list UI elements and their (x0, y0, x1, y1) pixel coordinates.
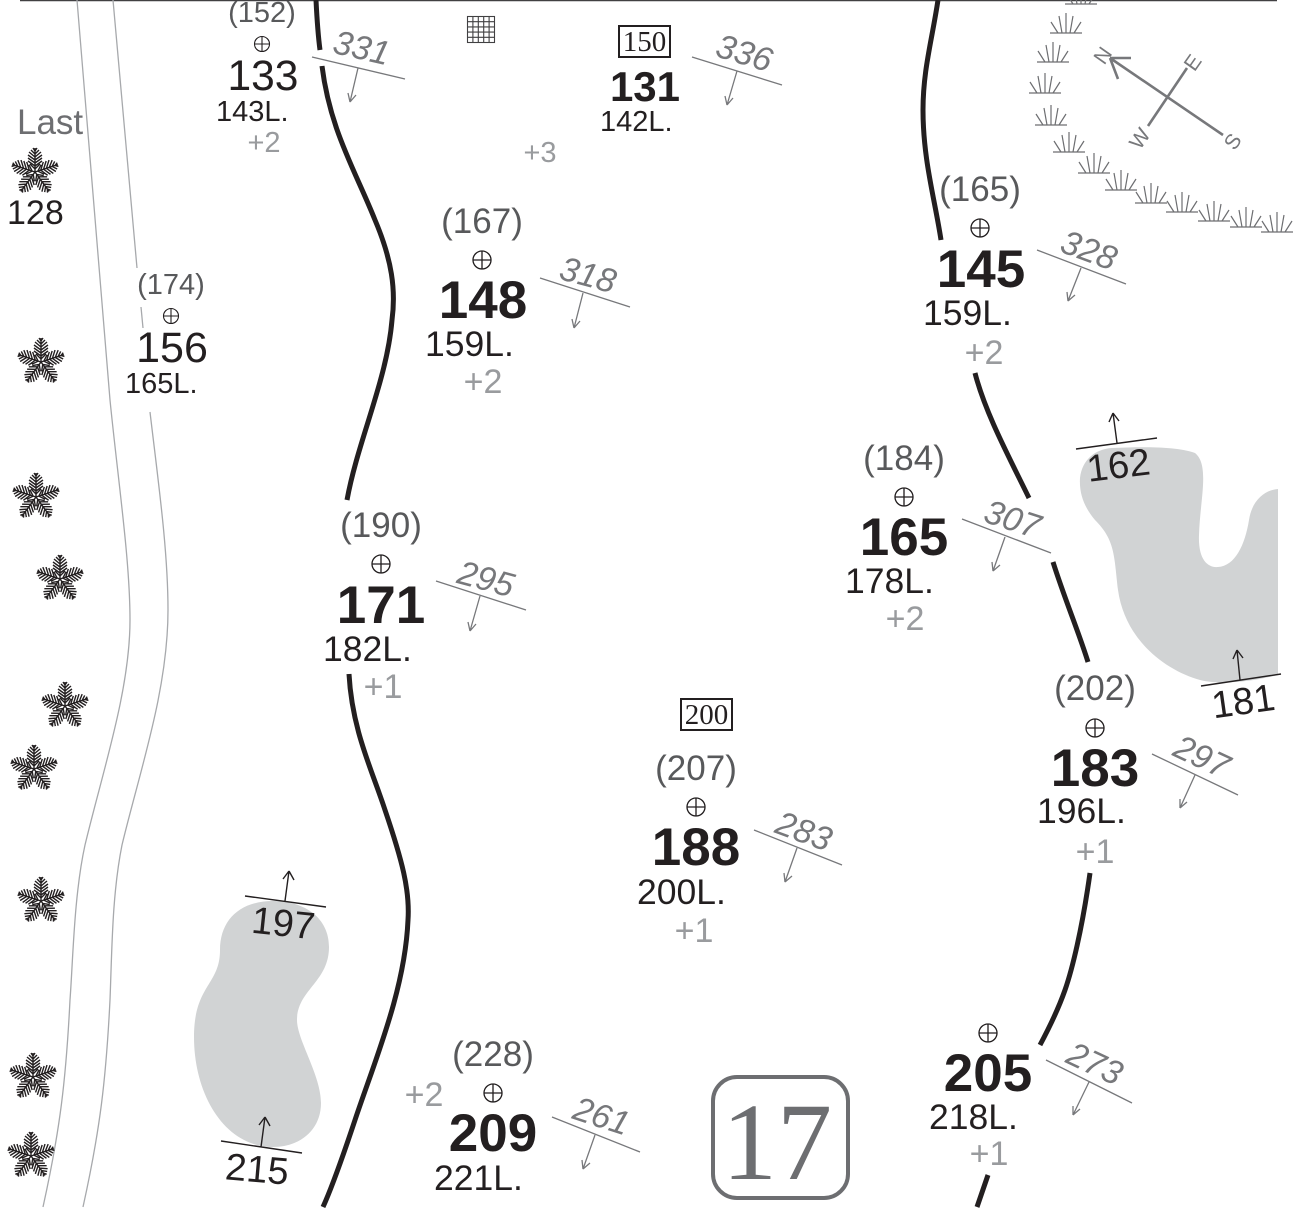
yardage 156: 156 (136, 324, 208, 372)
distance 295: 295 (453, 553, 518, 605)
yardage 171: 171 (337, 576, 425, 635)
yardage 133 (216, 0, 298, 159)
distance 307: 307 (980, 493, 1046, 547)
carry 215: 215 (224, 1146, 290, 1194)
label: 128: 128 (7, 194, 64, 232)
yardage 205: +1 (970, 1135, 1008, 1173)
yardage 183 (1037, 669, 1139, 871)
yardage 133: 143L. (216, 96, 289, 128)
yardage 148: 159L. (425, 324, 514, 364)
yardage 131: 131 (610, 63, 680, 110)
yardage 209: 221L. (434, 1158, 523, 1198)
yardage 171: +1 (364, 668, 402, 706)
carry 197: 197 (250, 900, 317, 948)
yardage 156: 165L. (125, 368, 198, 400)
carry 215 (221, 1117, 302, 1194)
trees (6, 148, 90, 1180)
yardage 183: +1 (1076, 833, 1114, 871)
yardage 188: (207) (655, 749, 737, 788)
top boundary line (20, 0, 1277, 1)
yardage 183: 183 (1051, 739, 1139, 798)
yardage 171: (190) (340, 506, 422, 545)
yardage 183: (202) (1054, 669, 1136, 708)
yardage 156: (174) (137, 269, 205, 301)
yardage 165: 178L. (845, 561, 934, 601)
yardage 133: 133 (228, 53, 298, 100)
yardage 171 (323, 506, 425, 706)
distance 331: 331 (330, 23, 393, 73)
carry 181: 181 (1209, 677, 1278, 727)
label: Last: Last (17, 103, 83, 142)
hole number 17: 17 (722, 1081, 832, 1203)
yardage 209: 209 (449, 1104, 537, 1163)
yardage 188: +1 (675, 912, 713, 950)
yardage 165 (845, 439, 948, 638)
yardage 183: 196L. (1037, 791, 1126, 831)
distance 328 (1037, 223, 1126, 301)
yardage 165: +2 (886, 600, 924, 638)
distance 261 (552, 1089, 640, 1169)
distance 336 (692, 27, 782, 105)
marker box 200: 200 (685, 699, 728, 731)
yardage 145: +2 (965, 334, 1003, 372)
yardage 205 (929, 1024, 1032, 1173)
yardage 171: 182L. (323, 629, 412, 669)
yardage 133: +2 (247, 127, 281, 159)
cart path (43, 0, 168, 1207)
bunker left (194, 901, 329, 1147)
yardage 156 (125, 269, 208, 400)
yardage 188: 200L. (637, 872, 726, 912)
distance 307 (962, 493, 1051, 571)
yardage 145 (923, 170, 1025, 372)
distance 336: 336 (712, 27, 777, 80)
compass: E (1180, 51, 1207, 75)
yardage 209: (228) (452, 1035, 534, 1074)
carry 181 (1201, 650, 1281, 727)
carry 197 (245, 871, 326, 948)
distance 273 (1046, 1034, 1132, 1115)
yardage 188: 188 (652, 818, 740, 877)
distance 328: 328 (1056, 223, 1122, 278)
yardage 205: 205 (944, 1044, 1032, 1103)
yardage 188 (637, 749, 740, 950)
grass rough (1029, 0, 1293, 232)
distance 318: 318 (556, 250, 620, 301)
yardage 145: 145 (937, 240, 1025, 299)
compass (1089, 43, 1247, 154)
marker box 150: 150 (623, 26, 666, 58)
distance 283: 283 (770, 804, 837, 859)
yardage 165: 165 (860, 508, 948, 567)
distance 297: 297 (1167, 727, 1236, 787)
yardage 165: (184) (863, 439, 945, 478)
distance 318 (540, 250, 630, 328)
distance 261: 261 (568, 1089, 634, 1143)
yardage 148: +2 (464, 363, 502, 401)
distance 297 (1152, 727, 1238, 808)
distance 283 (754, 804, 842, 882)
yardage 205: 218L. (929, 1097, 1018, 1137)
distance 331 (312, 23, 405, 102)
yardage 131 (600, 63, 680, 138)
compass: W (1125, 124, 1155, 154)
carry 162 (1076, 413, 1157, 491)
yardage 148: 148 (439, 271, 527, 330)
yardage 145: (165) (939, 170, 1021, 209)
fairway right edge (923, 0, 1090, 1207)
yardage 148 (425, 202, 527, 401)
icon: grid sprinkler (468, 16, 494, 42)
carry 162: 162 (1085, 441, 1153, 491)
yardage 209 (405, 1035, 537, 1198)
yardage 209: +2 (405, 1076, 443, 1114)
elevation +3: +3 (523, 137, 557, 169)
distance 295 (436, 553, 526, 631)
bunker right (1080, 447, 1278, 682)
distance 273: 273 (1060, 1034, 1128, 1093)
yardage 148: (167) (441, 202, 523, 241)
compass: N (1089, 43, 1117, 69)
fairway left edge (316, 0, 408, 1207)
yardage 145: 159L. (923, 293, 1012, 333)
yardage 131: 142L. (600, 106, 673, 138)
compass: S (1220, 130, 1247, 154)
